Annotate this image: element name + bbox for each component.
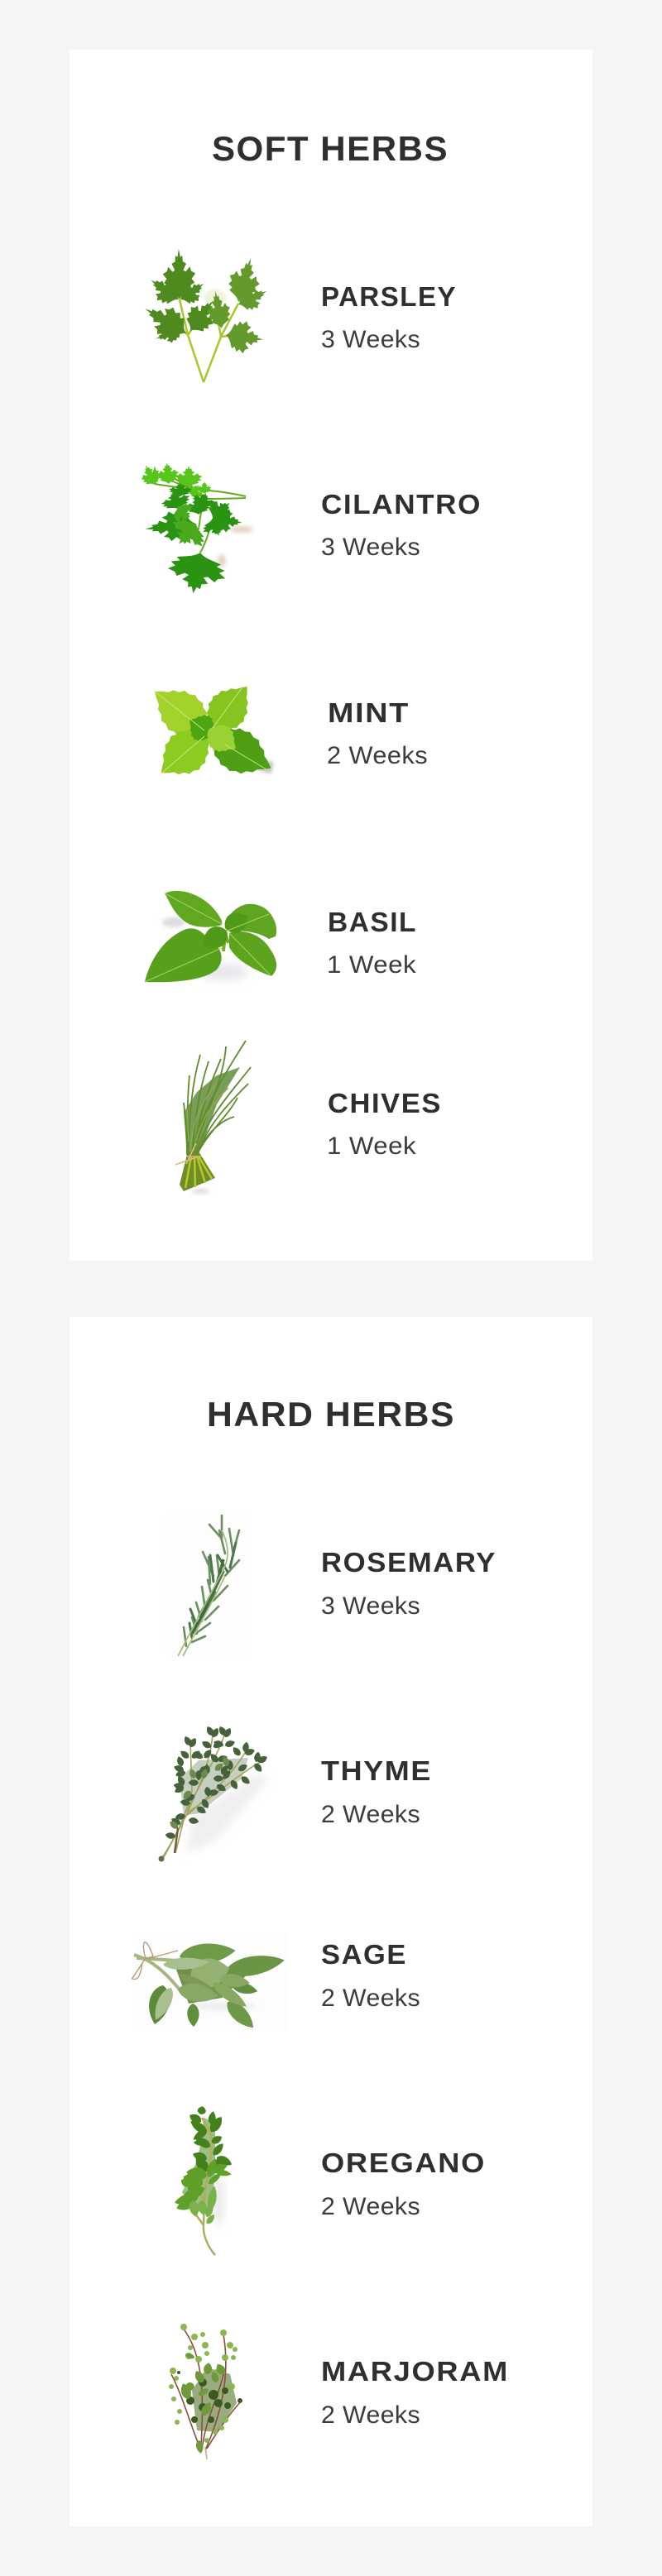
herb row: mint <box>142 673 428 790</box>
icon: rosemary <box>166 1514 248 1656</box>
herb row: cilantro <box>137 461 482 598</box>
herb row: rosemary <box>166 1514 496 1656</box>
heading: soft herbs: SOFT HERBS <box>212 129 449 168</box>
icon: thyme <box>159 1725 269 1861</box>
herb row: chives <box>175 1041 442 1194</box>
herb row: thyme <box>159 1725 432 1861</box>
herb row: basil <box>145 891 417 982</box>
duration: cilantro: 3 Weeks <box>321 534 420 561</box>
icon: chives <box>175 1041 251 1194</box>
icon: oregano <box>173 2105 233 2255</box>
herb row: parsley <box>137 249 457 382</box>
duration: thyme: 2 Weeks <box>321 1801 420 1828</box>
duration: marjoram: 2 Weeks <box>321 2401 420 2429</box>
name: parsley: PARSLEY <box>321 281 457 312</box>
name: mint: MINT <box>328 697 410 728</box>
name: basil: BASIL <box>328 907 417 937</box>
icon: marjoram <box>169 2324 242 2459</box>
icon: mint <box>142 673 281 790</box>
herb row: oregano <box>173 2105 486 2255</box>
name: oregano: OREGANO <box>321 2147 486 2178</box>
name: cilantro: CILANTRO <box>321 489 482 520</box>
duration: sage: 2 Weeks <box>321 1985 420 2012</box>
duration: rosemary: 3 Weeks <box>321 1592 420 1620</box>
duration: parsley: 3 Weeks <box>321 326 420 353</box>
heading: hard herbs: HARD HERBS <box>207 1395 455 1434</box>
herb row: marjoram <box>169 2324 509 2459</box>
icon: basil <box>145 891 276 982</box>
duration: basil: 1 Week <box>327 951 417 979</box>
duration: chives: 1 Week <box>327 1132 417 1160</box>
name: sage: SAGE <box>321 1939 407 1970</box>
name: marjoram: MARJORAM <box>321 2356 509 2387</box>
name: chives: CHIVES <box>328 1088 442 1118</box>
panel: hard herbs <box>70 1317 592 2526</box>
herb row: sage <box>132 1933 420 2033</box>
name: thyme: THYME <box>321 1755 432 1786</box>
icon: cilantro <box>137 461 253 598</box>
duration: oregano: 2 Weeks <box>321 2193 420 2220</box>
name: rosemary: ROSEMARY <box>321 1547 496 1578</box>
icon: sage <box>132 1933 287 2033</box>
duration: mint: 2 Weeks <box>327 742 428 769</box>
icon: parsley <box>137 249 271 382</box>
panel: soft herbs <box>70 50 592 1261</box>
